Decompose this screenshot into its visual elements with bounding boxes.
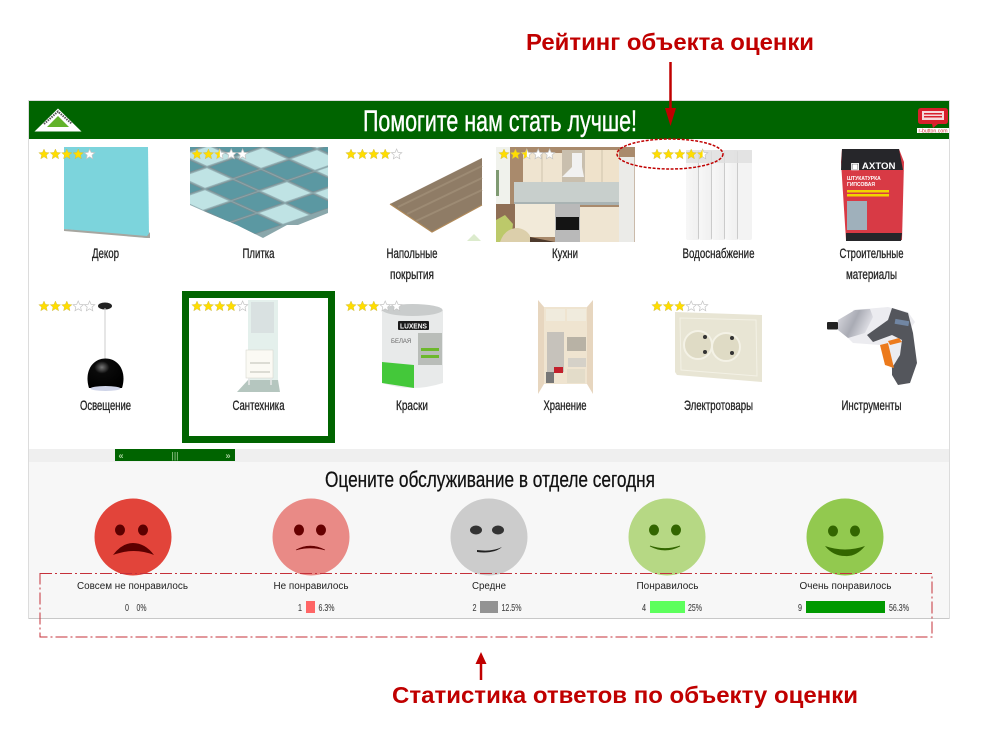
count and bar	[642, 601, 702, 614]
label: Хранение	[544, 397, 587, 413]
rating stars	[39, 149, 95, 159]
callout: rating ellipse highlight	[617, 139, 723, 169]
count and bar: 1	[298, 602, 302, 614]
label: Плитка	[242, 245, 275, 261]
icon: neutral face	[450, 498, 528, 576]
rating stars	[652, 301, 708, 311]
header bar	[29, 101, 949, 139]
image: pendant lamp	[87, 302, 124, 391]
count and bar: 4	[642, 602, 646, 614]
count and bar	[298, 601, 334, 614]
answer: Средне	[450, 498, 528, 614]
image: radiator	[686, 150, 752, 240]
image: Luxens paint can	[382, 304, 443, 388]
icon: sad face	[272, 498, 350, 576]
count and bar: 56.3%	[889, 602, 909, 614]
label: Декор	[92, 245, 119, 261]
icon: speech bubble logo	[917, 108, 949, 134]
tile: Строительные материалы: материалы	[846, 266, 897, 282]
selection frame	[186, 294, 332, 440]
tile: Электротовары	[652, 301, 762, 413]
scrollbar: |||	[171, 450, 179, 460]
tile: Плитка	[190, 147, 328, 258]
image: Axton plaster bag: ШТУКАТУРКА	[847, 176, 881, 182]
label: Средне	[472, 581, 506, 592]
label: Инструменты	[842, 397, 902, 413]
callout: statistics frame	[40, 574, 932, 637]
scrollbar: »	[225, 450, 231, 460]
count and bar: 2	[472, 602, 477, 614]
tile: Декор	[39, 147, 150, 261]
annotation: answer statistics: Статистика ответов по объекту оценки	[392, 682, 858, 708]
header title: Помогите нам стать лучше!	[363, 105, 637, 138]
answer: Не понравилось	[272, 498, 350, 614]
image: Luxens paint can: LUXENS	[400, 324, 427, 330]
rating stars	[499, 149, 555, 159]
count and bar	[472, 601, 522, 614]
rating stars	[192, 149, 248, 159]
count and bar: 9	[798, 602, 802, 614]
icon: very happy face	[806, 498, 884, 576]
label: Совсем не понравилось	[77, 581, 188, 592]
tile: Краски	[346, 301, 443, 413]
image: Luxens paint can: БЕЛАЯ	[391, 339, 411, 345]
count and percent: 0%	[136, 602, 146, 614]
image: Axton plaster bag: ▣ AXTON	[850, 161, 896, 171]
image: kitchen	[496, 147, 635, 242]
icon: smiling face	[628, 498, 706, 576]
section heading: Оцените обслуживание в отделе сегодня	[325, 467, 655, 492]
rating stars	[39, 301, 95, 311]
tile: Освещение	[39, 301, 131, 413]
image: open wardrobe	[538, 300, 593, 394]
icon: Leroy Merlin logo	[34, 108, 82, 132]
arrow: down to rating	[665, 62, 676, 126]
count and percent: 0	[125, 602, 129, 614]
label: Напольные	[386, 245, 438, 261]
tile: Строительные материалы	[840, 149, 904, 282]
label: Сантехника	[232, 397, 285, 413]
label: Электротовары	[684, 397, 753, 413]
count and bar: 25%	[688, 602, 702, 614]
label: Очень понравилось	[800, 581, 892, 592]
label: Кухни	[552, 245, 578, 261]
label: Водоснабжение	[682, 245, 755, 261]
answer: Понравилось	[628, 498, 706, 614]
rating stars	[346, 301, 402, 311]
image: double socket	[675, 312, 762, 382]
count and bar	[798, 601, 909, 614]
answer: Очень понравилось	[798, 498, 909, 614]
image: cordless screwdriver	[827, 307, 917, 385]
tile: Кухни	[496, 147, 635, 261]
tile: Напольные покрытия: покрытия	[390, 266, 434, 282]
label: Освещение	[80, 397, 131, 413]
rating stars	[346, 149, 402, 159]
label: Краски	[396, 397, 428, 413]
annotation: rating of the object: Рейтинг объекта оценки	[526, 29, 814, 55]
label: Не понравилось	[274, 581, 348, 592]
label: Строительные	[840, 245, 904, 261]
tile: Напольные покрытия	[346, 149, 482, 282]
scrollbar	[115, 449, 235, 461]
image: Axton plaster bag	[841, 149, 904, 241]
rating stars	[192, 301, 248, 311]
tile: Инструменты	[827, 307, 917, 413]
arrow: up to statistics	[476, 652, 486, 680]
answer: Совсем не понравилось	[77, 498, 188, 614]
tile: Сантехника (selected)	[186, 294, 332, 440]
app panel background	[28, 100, 950, 618]
rating stars	[652, 149, 708, 159]
count and bar: 12.5%	[502, 602, 522, 614]
icon: very sad face	[94, 498, 172, 576]
count and bar: 6.3%	[318, 602, 334, 614]
image: wallpaper roll	[64, 147, 150, 238]
count and percent	[125, 602, 146, 614]
image: laminate floor plank	[390, 158, 482, 241]
scrollbar: «	[118, 450, 124, 460]
tile: Хранение	[538, 300, 593, 413]
icon: speech bubble logo: r-button.com	[918, 128, 948, 134]
tile: Водоснабжение	[652, 149, 755, 261]
image: Axton plaster bag: ГИПСОВАЯ	[847, 182, 875, 188]
image: bathroom vanity	[237, 300, 280, 392]
label: Понравилось	[636, 581, 698, 592]
image: mosaic tile	[190, 147, 328, 238]
